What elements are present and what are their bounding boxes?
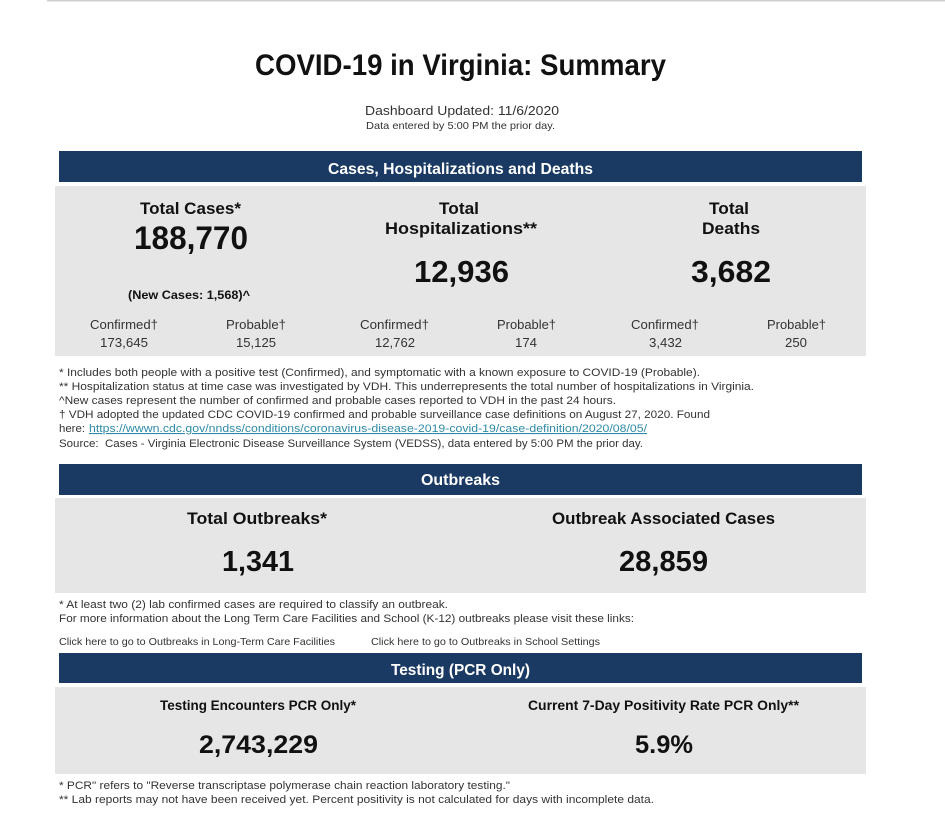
hospitalizations confirmed and probable breakdown: 12,762 bbox=[375, 336, 415, 350]
hospitalizations confirmed and probable breakdown: 174 bbox=[515, 336, 537, 350]
cases confirmed and probable breakdown: 173,645 bbox=[100, 336, 148, 350]
outbreak associated cases metric bbox=[552, 509, 775, 578]
footnotes: outbreaks section bbox=[59, 599, 634, 625]
total cases metric: Total Cases* bbox=[140, 199, 241, 218]
links to outbreak pages: Click here to go to Outbreaks in School Settings bbox=[371, 636, 600, 648]
section header: outbreaks: Outbreaks bbox=[421, 472, 500, 489]
testing encounters metric: Testing Encounters PCR Only* bbox=[160, 698, 357, 713]
cases confirmed and probable breakdown: 15,125 bbox=[236, 336, 276, 350]
deaths confirmed and probable breakdown: 250 bbox=[785, 336, 807, 350]
hospitalizations confirmed and probable breakdown: Probable† bbox=[497, 318, 556, 332]
section header: testing: Testing (PCR Only) bbox=[391, 662, 530, 679]
deaths confirmed and probable breakdown: 3,432 bbox=[649, 336, 682, 350]
subtitle: dashboard updated date: Data entered by 5:00 PM the prior day. bbox=[366, 120, 555, 132]
hospitalizations confirmed and probable breakdown: Confirmed† bbox=[360, 318, 429, 332]
total deaths metric: Total bbox=[709, 199, 749, 218]
total cases metric: 188,770 bbox=[134, 220, 248, 256]
deaths confirmed and probable breakdown: Confirmed† bbox=[631, 318, 699, 332]
total deaths metric bbox=[691, 199, 771, 289]
footnotes: cases section: * Includes both people with a positive test (Confirmed), and symptomatic with a known exposure to COVID-19 (Probable). bbox=[59, 367, 700, 379]
total hospitalizations metric: Hospitalizations** bbox=[385, 219, 537, 238]
cases confirmed and probable breakdown bbox=[90, 318, 286, 350]
section header: cases, hospitalizations and deaths: Cases, Hospitalizations and Deaths bbox=[328, 161, 593, 178]
links to outbreak pages bbox=[59, 636, 600, 648]
section header: testing bbox=[59, 653, 862, 683]
footnotes: testing section: ** Lab reports may not have been received yet. Percent positivity is not calculated for days with incomplete data. bbox=[59, 794, 654, 806]
footnotes: outbreaks section: * At least two (2) lab confirmed cases are required to classify an outbreak. bbox=[59, 599, 448, 611]
title: COVID-19 in Virginia: Summary bbox=[255, 49, 667, 82]
outbreak associated cases metric: 28,859 bbox=[619, 546, 708, 578]
footnotes: cases section: https://wwwn.cdc.gov/nndss/conditions/coronavirus-disease-2019-covid-19/case-definition/2020/08/05/ bbox=[89, 423, 648, 435]
footnotes: cases section bbox=[59, 367, 754, 450]
total outbreaks metric bbox=[187, 509, 327, 578]
testing encounters metric: 2,743,229 bbox=[199, 731, 318, 759]
section header: cases, hospitalizations and deaths bbox=[59, 151, 862, 182]
footnotes: outbreaks section: For more information about the Long Term Care Facilities and School (K-12) outbreaks please visit these links: bbox=[59, 613, 634, 625]
testing encounters metric bbox=[160, 698, 357, 759]
total hospitalizations metric: Total bbox=[439, 199, 479, 218]
subtitle: dashboard updated date: Dashboard Updated: 11/6/2020 bbox=[365, 103, 559, 118]
panel: cases, hospitalizations and deaths bbox=[55, 186, 866, 356]
panel: testing bbox=[55, 687, 866, 774]
links to outbreak pages: Click here to go to Outbreaks in Long-Term Care Facilities bbox=[59, 636, 335, 648]
footnotes: cases section: Source: Cases - Virginia Electronic Disease Surveillance System (VEDSS), data entered by 5:00 PM the prior day. bbox=[59, 438, 643, 450]
total outbreaks metric: 1,341 bbox=[222, 546, 294, 578]
hospitalizations confirmed and probable breakdown bbox=[360, 318, 556, 350]
footnotes: cases section: ^New cases represent the number of confirmed and probable cases reported to VDH in the past 24 hours. bbox=[59, 395, 616, 407]
positivity rate metric: Current 7-Day Positivity Rate PCR Only** bbox=[528, 698, 800, 713]
cases confirmed and probable breakdown: Confirmed† bbox=[90, 318, 158, 332]
panel: outbreaks bbox=[55, 498, 866, 593]
total hospitalizations metric bbox=[385, 199, 537, 289]
outbreak associated cases metric: Outbreak Associated Cases bbox=[552, 509, 775, 528]
footnotes: cases section: ** Hospitalization status at time case was investigated by VDH. This underrepresents the total number of hospitalizations in Virginia. bbox=[59, 381, 754, 393]
deaths confirmed and probable breakdown: Probable† bbox=[767, 318, 826, 332]
total outbreaks metric: Total Outbreaks* bbox=[187, 509, 327, 528]
cases confirmed and probable breakdown: Probable† bbox=[226, 318, 286, 332]
deaths confirmed and probable breakdown bbox=[631, 318, 826, 350]
total cases metric bbox=[128, 199, 250, 302]
positivity rate metric bbox=[528, 698, 800, 759]
footnotes: cases section: † VDH adopted the updated CDC COVID-19 confirmed and probable surveillance case definitions on August 27, 2020. Found bbox=[59, 409, 710, 421]
total cases metric: (New Cases: 1,568)^ bbox=[128, 288, 250, 302]
positivity rate metric: 5.9% bbox=[635, 731, 693, 759]
subtitle: dashboard updated date bbox=[365, 103, 559, 132]
total deaths metric: 3,682 bbox=[691, 254, 771, 289]
footnotes: testing section: * PCR" refers to "Reverse transcriptase polymerase chain reaction laboratory testing." bbox=[59, 780, 510, 792]
footnotes: testing section bbox=[59, 780, 654, 806]
footnotes: cases section: here: bbox=[59, 423, 85, 435]
section header: outbreaks bbox=[59, 464, 862, 495]
total hospitalizations metric: 12,936 bbox=[414, 254, 509, 289]
total deaths metric: Deaths bbox=[702, 219, 760, 238]
